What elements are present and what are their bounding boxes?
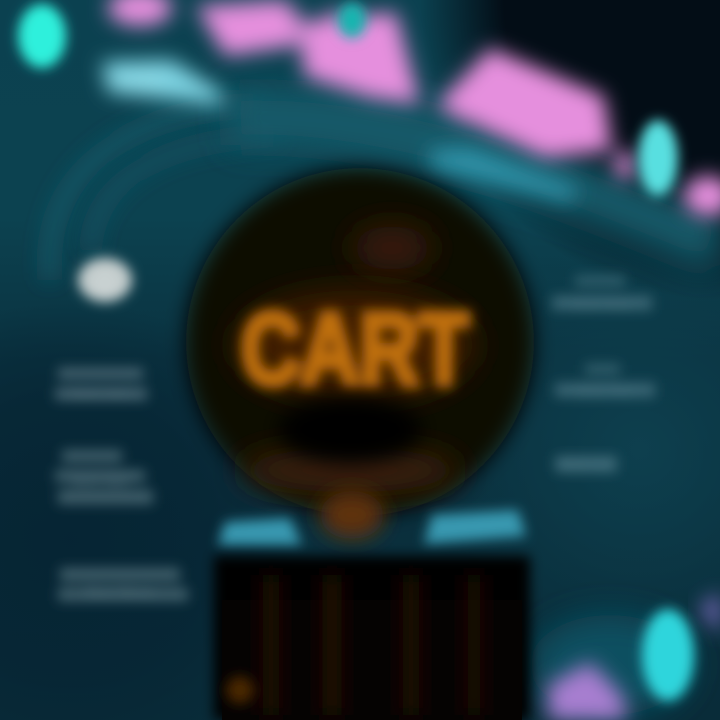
right text block 3: Item six — [560, 457, 612, 473]
teal ledge right — [424, 510, 526, 544]
pink accent bottom right — [700, 592, 720, 635]
heading: pink arc title: DSLA — [225, 0, 350, 52]
left text block 2: Item two — [72, 473, 128, 489]
left text block 1: Item one — [71, 385, 129, 401]
right text block 1 — [552, 276, 652, 313]
central circle — [186, 168, 534, 516]
icon: cyan dot in heading — [338, 2, 366, 38]
stem connector — [320, 491, 384, 539]
right text block 2 — [555, 364, 655, 399]
subheading: top left label — [102, 60, 222, 105]
main word: CART — [241, 292, 469, 406]
left text block 3: Item three — [87, 583, 154, 599]
subheading: arc label — [428, 148, 578, 202]
icon: cyan drop top left — [18, 4, 66, 68]
icon: cyan drop top right — [638, 120, 678, 196]
teal ledge left — [218, 518, 302, 545]
dark mouth shape — [278, 397, 422, 463]
icon: cyan drop bottom right — [642, 609, 694, 701]
heading: pink arc title: FIRE — [452, 81, 568, 165]
left text block 1 — [55, 368, 147, 401]
bottom dark panel — [214, 556, 530, 720]
right text block 2: Item five — [577, 383, 634, 399]
heading: pink arc title — [108, 0, 720, 216]
left text block 3 — [58, 568, 188, 601]
purple shape bottom right — [548, 662, 628, 720]
left label: white heading: A — [95, 267, 115, 298]
left text block 2 — [55, 450, 153, 504]
left label: white heading — [78, 258, 132, 302]
subheading: top left label: Label — [105, 68, 162, 93]
icon: small orange dot — [226, 676, 254, 704]
right text block 1: Item four — [572, 297, 632, 313]
